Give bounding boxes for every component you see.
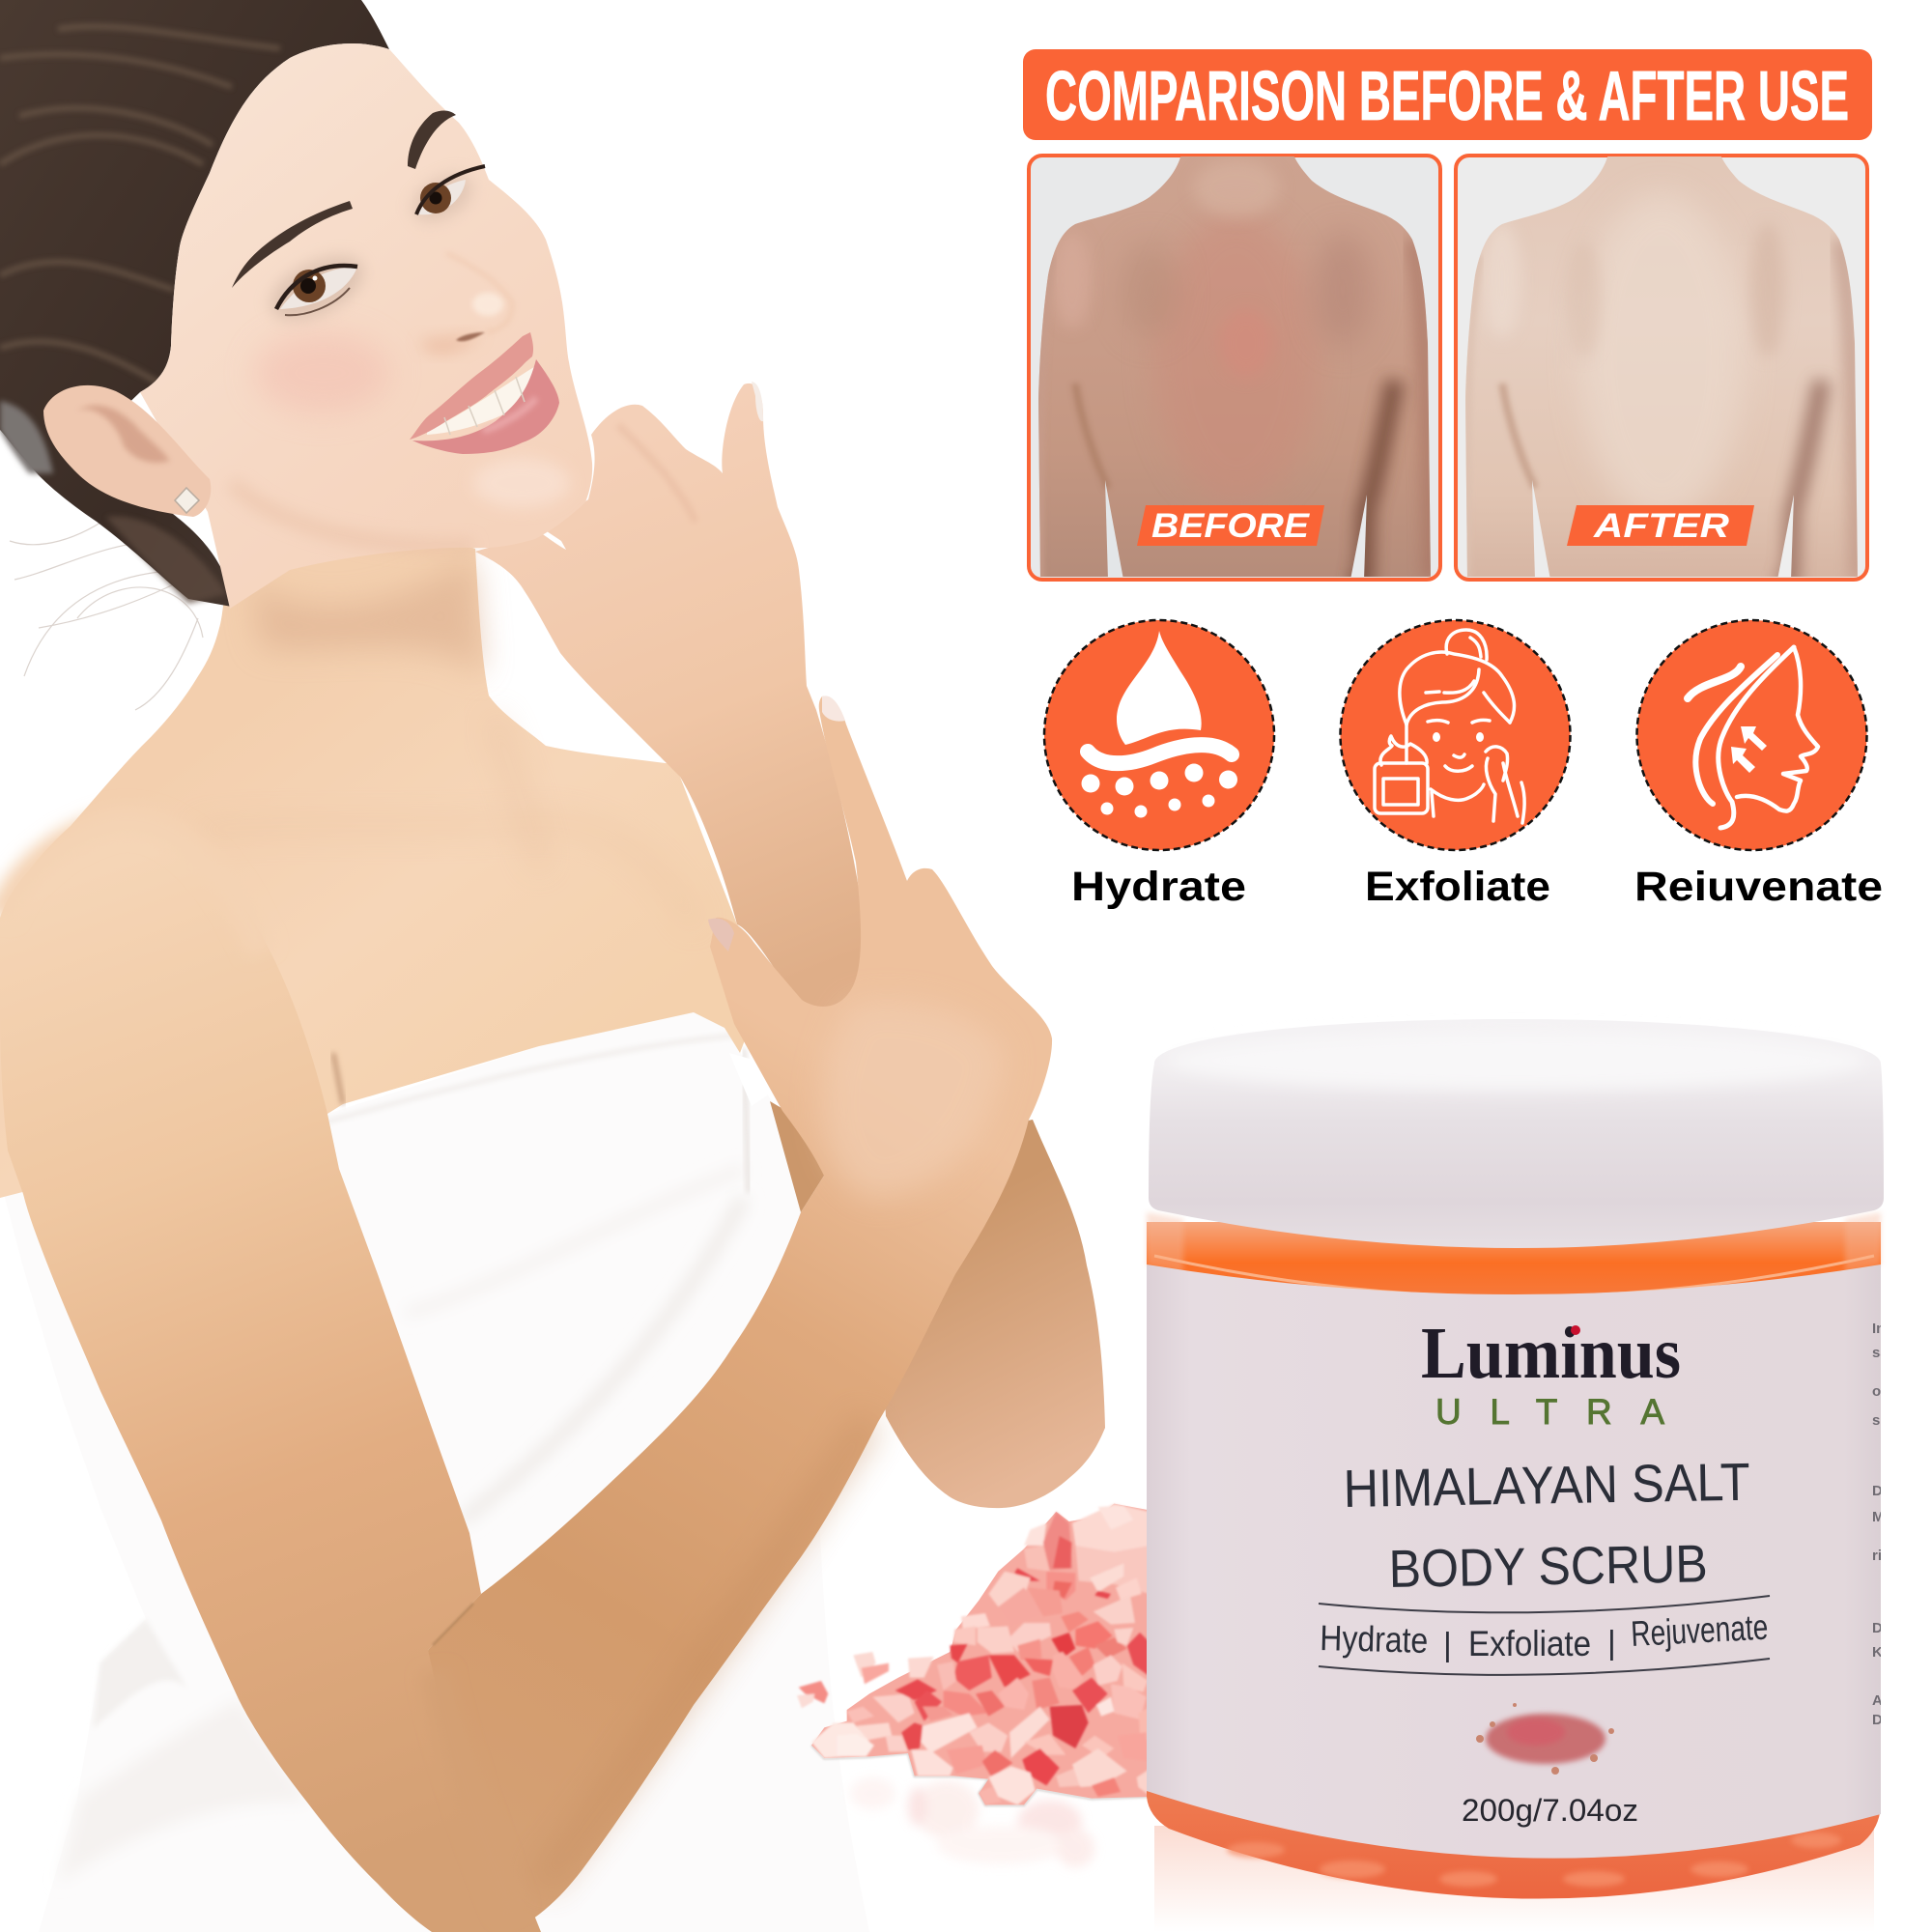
back skin after [1465, 150, 1858, 580]
collar shading [193, 821, 696, 927]
far eye [405, 165, 485, 231]
smile [410, 332, 559, 454]
upper arm [0, 820, 541, 1932]
elbow blend [435, 1671, 512, 1913]
jar body [1147, 1222, 1881, 1899]
jar side translucency [1147, 1212, 1881, 1271]
side label fine print: Ind [1872, 1321, 1893, 1337]
knuckle shading [618, 425, 696, 522]
shoulder blend [0, 820, 261, 952]
upper hand and wrist [475, 384, 867, 1072]
before label [1137, 505, 1324, 546]
benefits row: Exfoliate [1468, 1624, 1591, 1663]
face [140, 43, 592, 609]
lid [1149, 1019, 1884, 1248]
brand subline: ULTRA [1435, 1392, 1664, 1432]
arm shading [541, 1420, 869, 1884]
benefits row: Hydrate [1320, 1618, 1429, 1661]
nose highlight [472, 293, 503, 316]
panel: after photo [1456, 150, 1867, 580]
lower hair fade [106, 516, 227, 604]
nail upper finger [752, 382, 763, 421]
towel [4, 1012, 869, 1932]
side label fine print: ski [1872, 1412, 1892, 1429]
side label fine print: Dis [1872, 1712, 1894, 1728]
hair [0, 0, 389, 607]
lid top highlight [1169, 1032, 1864, 1090]
benefits row: | [1443, 1627, 1452, 1663]
net weight: 200g/7.04oz [1462, 1793, 1638, 1828]
far eyebrow [408, 111, 456, 169]
benefits row: Rejuvenate [1630, 1607, 1769, 1654]
cheek blush [255, 332, 390, 413]
white gap by chin [537, 526, 566, 550]
arm behind body [770, 1101, 1105, 1508]
icon: hydrate [1044, 620, 1274, 850]
after label: AFTER [1593, 507, 1730, 545]
side label fine print: KEE [1872, 1644, 1902, 1661]
nose contour [446, 253, 512, 332]
label: exfoliate: Exfoliate [1365, 864, 1550, 910]
torso, neck and chest [0, 483, 773, 1198]
scrub granules [1227, 1833, 1841, 1887]
salt crystal pile [797, 1504, 1151, 1867]
near eye [261, 243, 373, 332]
brand wordmark: Luminus [1421, 1313, 1681, 1394]
back skin before [1038, 150, 1431, 580]
product jar [1147, 1019, 1902, 1899]
elbow crease [433, 1604, 473, 1645]
lower face shading [232, 483, 473, 547]
side label fine print: o a [1872, 1383, 1893, 1400]
ear inner shading [77, 406, 170, 463]
benefits row [1320, 1607, 1769, 1663]
ear [43, 385, 211, 517]
earring [175, 488, 199, 513]
before label: BEFORE [1151, 507, 1311, 545]
nose shading [419, 334, 483, 354]
benefits row: | [1607, 1625, 1616, 1662]
nostril [456, 332, 485, 341]
label salt illustration [1476, 1703, 1614, 1775]
loose hair wisps [10, 512, 203, 710]
forearm and lower hand [428, 696, 1052, 1932]
label: rejuvenate: Reiuvenate [1634, 864, 1883, 910]
side label fine print: Ad [1872, 1692, 1891, 1709]
jar rim highlight [1154, 1256, 1874, 1296]
photo: woman in towel [0, 0, 1105, 1932]
rule below benefits [1319, 1659, 1770, 1675]
rule above benefits [1319, 1596, 1770, 1612]
pile base [811, 1504, 1151, 1804]
hair highlights [0, 26, 280, 386]
side label fine print: Dis [1872, 1620, 1894, 1636]
product name line 2: BODY SCRUB [1388, 1533, 1708, 1599]
icon: rejuvenate [1636, 620, 1866, 850]
jar label [1147, 1264, 1881, 1859]
icon: exfoliate [1341, 620, 1571, 850]
nape grey hair [0, 401, 53, 473]
armpit crease [333, 1053, 343, 1104]
near eyebrow [232, 201, 353, 288]
crystals [797, 1504, 1151, 1804]
panel: before photo [1029, 150, 1440, 580]
salt reflection [850, 1777, 1094, 1867]
side label fine print: sal [1872, 1345, 1892, 1361]
jar reflection [1154, 1826, 1874, 1932]
product name line 1: HIMALAYAN SALT [1343, 1452, 1750, 1519]
side label fine print: Dir [1872, 1483, 1892, 1499]
neck shadow [251, 555, 483, 676]
after label [1567, 505, 1754, 546]
red dot [1571, 1325, 1580, 1335]
label: hydrate: Hydrate [1071, 864, 1246, 910]
side label fine print: Mas [1872, 1509, 1900, 1525]
lower hand highlight [822, 1002, 1005, 1198]
jaw highlight [473, 458, 570, 508]
pile shadow [811, 1746, 1151, 1805]
fingernail lower hand [822, 696, 845, 722]
side label fine print [1872, 1321, 1902, 1728]
side label fine print: rins [1872, 1548, 1899, 1564]
